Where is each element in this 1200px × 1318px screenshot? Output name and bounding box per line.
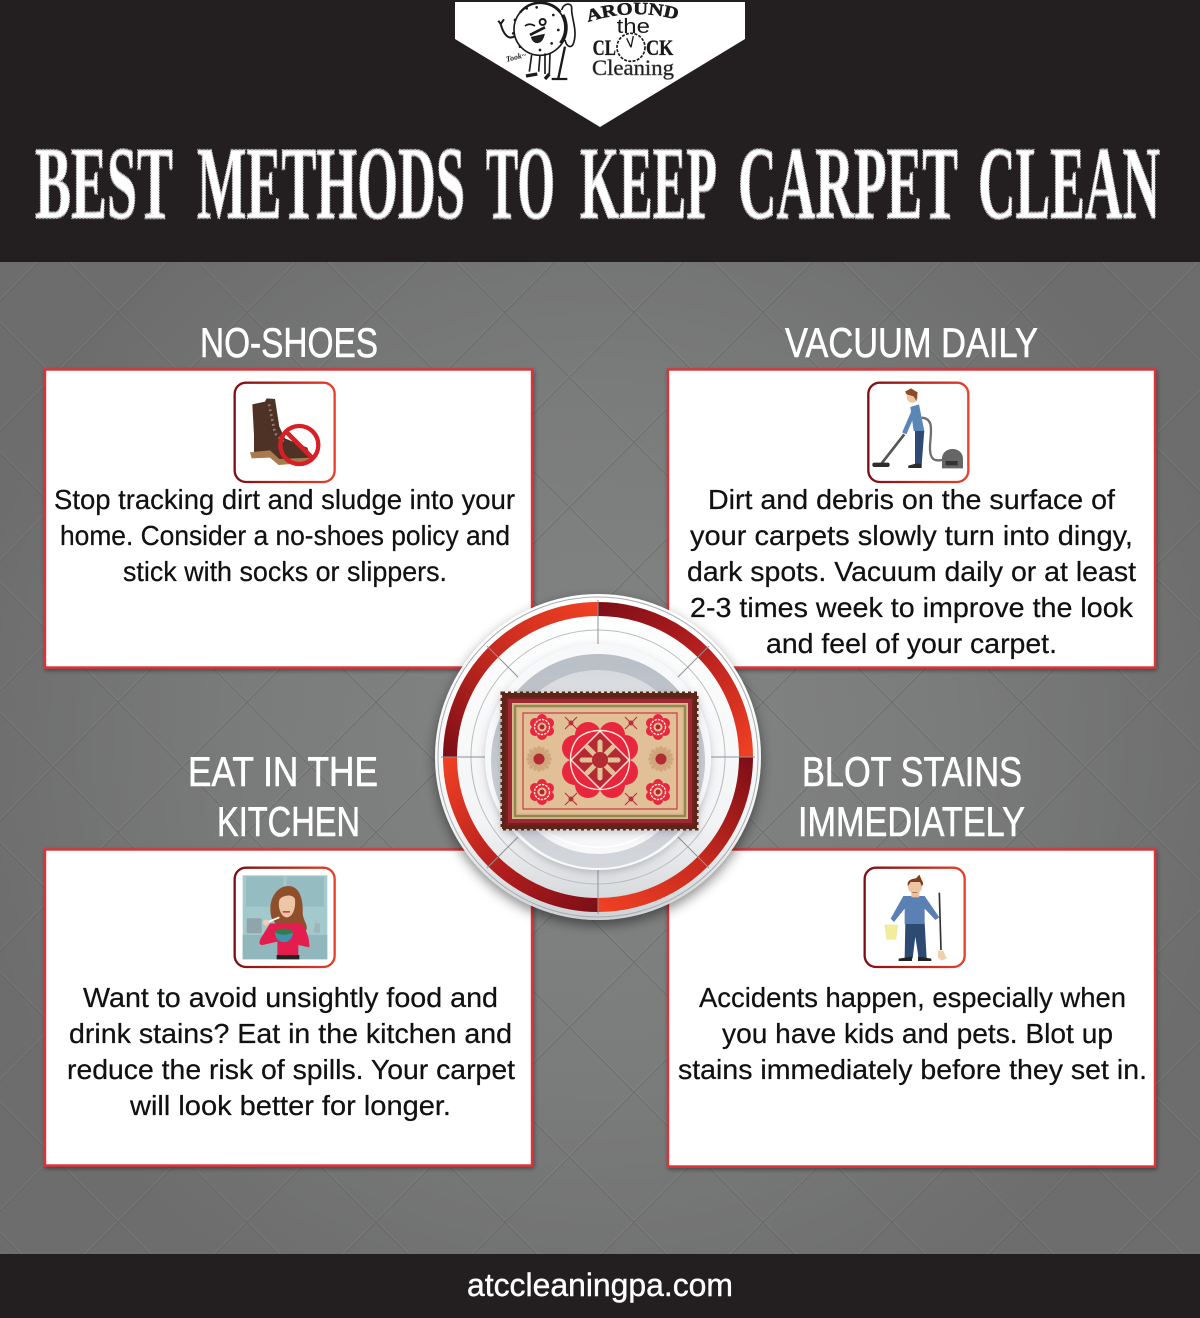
- text: eat in the kitchen: will look better for longer.: [129, 1090, 451, 1121]
- text: vacuum daily: Dirt and debris on the surface of: [708, 484, 1115, 515]
- icon: woman eating: [235, 868, 335, 967]
- footer: [0, 1254, 1200, 1318]
- header band: [0, 0, 1200, 262]
- text: vacuum daily: 2-3 times week to improve the look: [690, 592, 1134, 623]
- heading: blot stains immediately: [798, 748, 1025, 845]
- background: [0, 262, 1200, 1254]
- logo: Took~: [505, 50, 528, 64]
- logo wordmark: Cleaning: [592, 55, 674, 80]
- icon: clock mascot: [498, 3, 575, 79]
- title: CARPET: [738, 126, 958, 241]
- icon: boot with no sign: [235, 383, 335, 482]
- rug centre flower: [562, 722, 638, 798]
- text: blot stains: you have kids and pets. Blot up: [722, 1018, 1113, 1049]
- card: blot stains immediately: [668, 850, 1155, 1166]
- title: TO: [486, 126, 555, 241]
- panel: vacuum daily: [668, 319, 1155, 668]
- title: BEST: [35, 126, 173, 241]
- card: vacuum daily: [668, 370, 1155, 668]
- logo wordmark: the: [617, 15, 650, 38]
- central medallion: [435, 594, 761, 920]
- text: blot stains: Accidents happen, especially when: [699, 982, 1126, 1013]
- text: eat in the kitchen: drink stains? Eat in the kitchen and: [69, 1018, 512, 1049]
- card: no-shoes: [45, 370, 532, 668]
- website address: atccleaningpa.com: [467, 1267, 733, 1303]
- card: eat in the kitchen: [45, 850, 532, 1166]
- title: METHODS: [197, 126, 465, 241]
- logo: [455, 2, 745, 127]
- rug corner motifs: [528, 714, 672, 805]
- heading: eat in the kitchen: [188, 748, 378, 845]
- heading: vacuum daily: VACUUM DAILY: [785, 319, 1038, 366]
- logo wordmark: CL: [593, 35, 616, 60]
- text: vacuum daily: your carpets slowly turn into dingy,: [690, 520, 1133, 551]
- icon: man with mop and bucket: [865, 868, 965, 967]
- text: no-shoes: Stop tracking dirt and sludge into your: [54, 484, 515, 515]
- logo wordmark: [588, 2, 678, 80]
- heading: no-shoes: NO-SHOES: [200, 319, 378, 366]
- panel: blot stains immediately: [668, 748, 1155, 1166]
- title: KEEP: [580, 126, 717, 241]
- text: eat in the kitchen: reduce the risk of spills. Your carpet: [67, 1054, 515, 1085]
- illustration: patterned red rug: [502, 693, 697, 829]
- heading: blot stains immediately: IMMEDIATELY: [798, 798, 1025, 845]
- text: vacuum daily: [687, 484, 1136, 659]
- heading: eat in the kitchen: KITCHEN: [217, 798, 360, 845]
- text: blot stains: stains immediately before they set in.: [678, 1054, 1147, 1085]
- text: no-shoes: home. Consider a no-shoes policy and: [60, 520, 510, 551]
- heading: blot stains immediately: BLOT STAINS: [802, 748, 1022, 795]
- text: no-shoes: stick with socks or slippers.: [123, 556, 447, 587]
- heading: eat in the kitchen: EAT IN THE: [188, 748, 378, 795]
- panel: no-shoes: [45, 319, 532, 668]
- logo wordmark: CK: [646, 35, 674, 60]
- title: [35, 126, 1160, 241]
- text: no-shoes: [54, 484, 515, 587]
- red ring: [450, 609, 746, 905]
- text: eat in the kitchen: [67, 982, 515, 1121]
- text: blot stains: [678, 982, 1147, 1085]
- panel: eat in the kitchen: [45, 748, 532, 1166]
- text: vacuum daily: and feel of your carpet.: [766, 628, 1057, 659]
- icon: person vacuuming: [868, 383, 968, 482]
- text: eat in the kitchen: Want to avoid unsightly food and: [83, 982, 498, 1013]
- text: vacuum daily: dark spots. Vacuum daily or at least: [687, 556, 1136, 587]
